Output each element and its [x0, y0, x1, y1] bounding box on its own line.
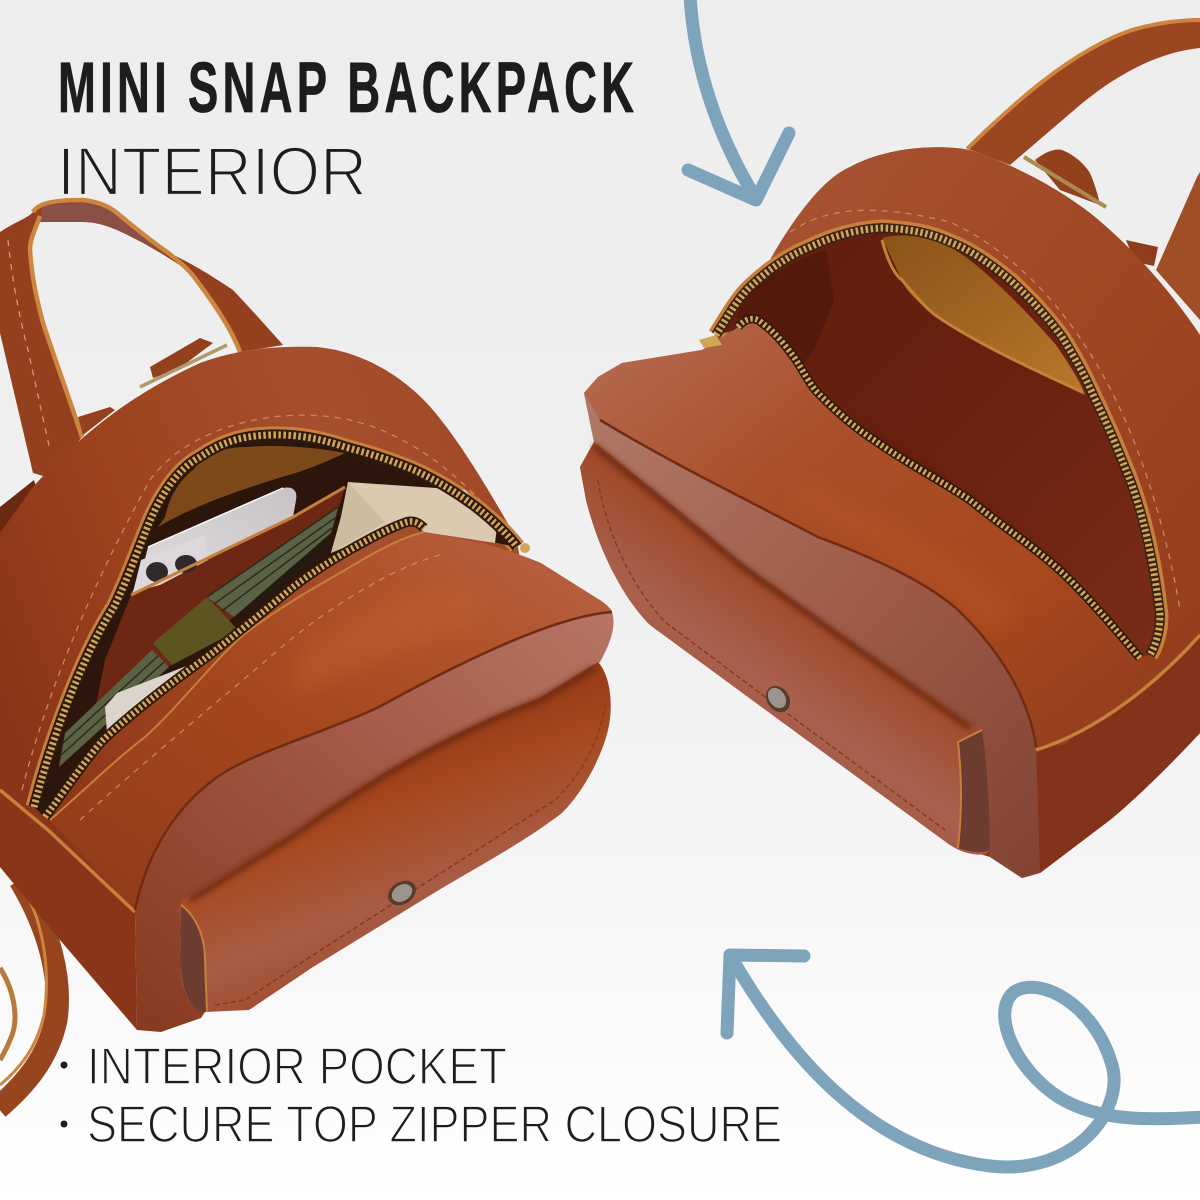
- left bag interior pocket: [95, 487, 345, 710]
- right bag pocket edge: [882, 240, 1082, 392]
- interior pocket edge: [131, 487, 345, 595]
- green wallet: [59, 507, 338, 767]
- left bag pocket shadow: [190, 668, 595, 900]
- right bag zipper edge: [716, 228, 1160, 655]
- left bag lip top edge: [50, 532, 424, 820]
- left bag buckle: [140, 338, 227, 387]
- right bag interior: [716, 228, 1160, 658]
- right bag pocket stitching: [598, 480, 945, 830]
- right bag silhouette: [580, 147, 1200, 878]
- right bag top stitching: [790, 210, 1180, 610]
- left bag pocket stitching: [215, 700, 606, 1005]
- right bag zipper pull: [699, 335, 722, 348]
- left bag zipper edge: [34, 435, 517, 807]
- right bag gusset: [1036, 635, 1200, 873]
- left bag lip stitching: [80, 555, 440, 820]
- left bag lip seam: [135, 612, 612, 910]
- right bag interior left wall: [735, 250, 834, 368]
- bullet item 2: SECURE TOP ZIPPER CLOSURE: [87, 1096, 782, 1154]
- right bag body: [714, 147, 1200, 760]
- right bag front zipper: [738, 319, 1140, 658]
- right bag front lip: [584, 319, 1140, 747]
- right bag snap: [761, 681, 795, 717]
- right bag lip highlight: [790, 480, 1020, 630]
- left bag side band: [135, 612, 614, 1032]
- right bag side band: [584, 393, 1040, 878]
- right bag lip seam: [600, 420, 1036, 747]
- right bag interior dark shadow: [830, 420, 1060, 600]
- left bag handle: [0, 200, 283, 478]
- left bag dark side strap: [0, 480, 37, 540]
- left bag body: [0, 347, 520, 910]
- right bag handle: [966, 18, 1200, 165]
- left bag front lip: [50, 532, 612, 910]
- bullet item 1: INTERIOR POCKET: [87, 1038, 507, 1096]
- left backpack: [0, 200, 614, 1108]
- right bag seam: [1036, 635, 1200, 750]
- right backpack: [580, 18, 1200, 878]
- right bag small strap tab: [1126, 240, 1158, 266]
- title line 2: INTERIOR: [57, 133, 367, 210]
- beige box: [331, 482, 497, 553]
- left bag back zipper: [34, 435, 517, 807]
- olive tab: [153, 597, 238, 665]
- left bag tan lining: [158, 446, 345, 527]
- left bag front zipper: [45, 521, 424, 817]
- feature list: [60, 1038, 782, 1154]
- left bag pocket: [180, 662, 611, 1012]
- title line 1: MINI SNAP BACKPACK: [58, 48, 634, 127]
- right bag tan lining: [882, 235, 1085, 395]
- left bag gusset: [0, 790, 137, 1030]
- left bag snap: [383, 876, 421, 910]
- phone: [131, 488, 296, 595]
- left bag lower strap: [0, 880, 58, 1108]
- tissue: [105, 658, 207, 733]
- left bag rear strap piece: [78, 407, 115, 435]
- right bag side strap: [1156, 172, 1200, 320]
- right bag back zipper: [716, 228, 1160, 655]
- blue arrow: top: [688, 0, 789, 200]
- left bag top stitching: [22, 415, 480, 790]
- left bag zipper pull: [520, 543, 530, 553]
- right bag pocket: [580, 442, 990, 855]
- left bag side seam: [0, 790, 135, 912]
- left bag pocket fold edge: [181, 905, 207, 1012]
- right bag pocket shadow: [594, 446, 970, 728]
- left bag lip highlight: [290, 585, 490, 695]
- blue arrow: bottom looping: [727, 955, 1200, 1167]
- left bag pocket fold: [180, 905, 207, 1012]
- right bag pocket fold: [958, 730, 990, 852]
- left bag interior: [34, 435, 517, 817]
- title: [57, 48, 634, 210]
- right bag buckle: [1024, 149, 1106, 207]
- right bag pocket fold edge: [958, 730, 982, 848]
